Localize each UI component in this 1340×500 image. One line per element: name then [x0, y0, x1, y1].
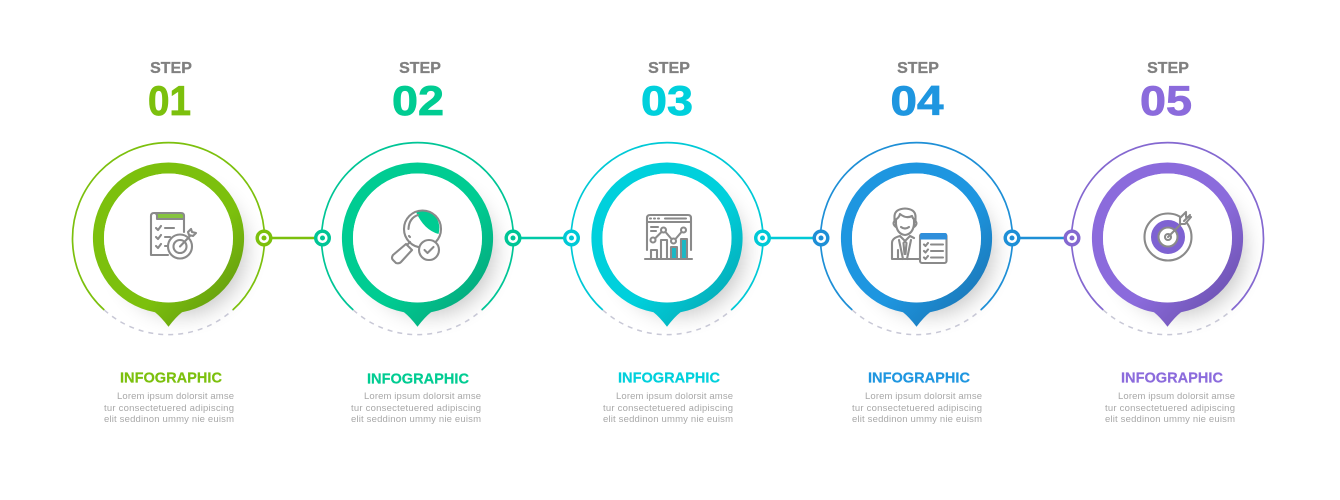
- step 3: [571, 60, 763, 425]
- step 4 heading: INFOGRAPHIC: [868, 370, 970, 386]
- step 1 outer ring: [72, 143, 264, 310]
- step 4 dashed arc: [852, 310, 981, 335]
- step 3 dashed arc: [603, 310, 731, 335]
- step 2 heading: INFOGRAPHIC: [367, 370, 469, 388]
- step 1 pin ring: [93, 162, 244, 327]
- icon: target with arrow: [1144, 212, 1192, 260]
- step 2 shadow: [366, 187, 494, 315]
- step 1 description: tur consectetuered adipiscing: [104, 403, 234, 414]
- step 4 description: tur consectetuered adipiscing: [852, 403, 982, 414]
- step 3 number: 03: [641, 77, 693, 124]
- step 4 label: STEP: [897, 60, 939, 77]
- step 2 inner disc: [353, 174, 482, 302]
- step 2: [322, 60, 514, 425]
- step 1 description: Lorem ipsum dolorsit amse: [117, 391, 234, 402]
- step 3 description: elit seddinon ummy nie euism: [603, 414, 733, 425]
- step 5 description: Lorem ipsum dolorsit amse: [1118, 391, 1235, 402]
- step 4 shadow: [866, 187, 994, 315]
- connector 1 to 2: [257, 231, 329, 245]
- step 5 description: elit seddinon ummy nie euism: [1105, 414, 1235, 425]
- step 2 description: tur consectetuered adipiscing: [351, 403, 481, 414]
- step 3 label: STEP: [648, 60, 690, 77]
- step 1 inner disc: [104, 174, 233, 302]
- step 3 description: tur consectetuered adipiscing: [603, 403, 733, 414]
- step 3 description: [603, 391, 733, 425]
- step 5 heading: INFOGRAPHIC: [1121, 370, 1223, 386]
- connector 2 to 3: [506, 231, 578, 245]
- step 2 dashed arc: [353, 310, 482, 335]
- step 4 inner disc: [852, 174, 981, 302]
- connector 4 to 5: [1005, 231, 1079, 245]
- step 5 number: 05: [1140, 77, 1192, 124]
- connector 3 to 4: [756, 231, 828, 245]
- icon: person with checklist: [892, 208, 947, 263]
- step 4 outer ring: [820, 143, 1012, 310]
- step 3 heading: INFOGRAPHIC: [618, 370, 720, 386]
- step 2 outer ring: [322, 143, 514, 310]
- step 5 shadow: [1116, 187, 1244, 315]
- step 5 dashed arc: [1103, 310, 1232, 335]
- step 1 label: STEP: [150, 60, 192, 77]
- step 1: [72, 60, 264, 425]
- step 4 description: [852, 391, 982, 425]
- step 5 label: STEP: [1147, 60, 1189, 77]
- step 5 outer ring: [1072, 143, 1264, 310]
- step 3 pin ring: [591, 162, 743, 327]
- step 3 inner disc: [602, 174, 732, 302]
- icon: magnifier with check: [392, 210, 441, 263]
- step 5 description: [1105, 391, 1235, 425]
- icon: analytics window: [645, 215, 692, 259]
- step 2 description: elit seddinon ummy nie euism: [351, 414, 481, 425]
- step 1 description: elit seddinon ummy nie euism: [104, 414, 234, 425]
- step 2 label: STEP: [399, 60, 441, 77]
- step 5: [1072, 60, 1264, 425]
- step 4: [820, 60, 1012, 425]
- step 1 heading: INFOGRAPHIC: [120, 370, 222, 386]
- step 2 description: [351, 391, 481, 425]
- step 5 inner disc: [1103, 174, 1232, 302]
- step 2 pin ring: [342, 162, 493, 327]
- step 1 description: [104, 391, 234, 425]
- step 5 description: tur consectetuered adipiscing: [1105, 403, 1235, 414]
- step 3 description: Lorem ipsum dolorsit amse: [616, 391, 733, 402]
- step 1 shadow: [118, 187, 246, 315]
- step 3 shadow: [616, 187, 744, 315]
- step 4 number: 04: [890, 77, 944, 124]
- icon: checklist with target: [151, 213, 196, 258]
- step 4 pin ring: [841, 162, 992, 327]
- step 2 description: Lorem ipsum dolorsit amse: [364, 391, 481, 402]
- step 1 number: 01: [148, 77, 191, 124]
- step 3 outer ring: [571, 143, 763, 310]
- step 4 description: Lorem ipsum dolorsit amse: [865, 391, 982, 402]
- step 1 dashed arc: [104, 310, 233, 335]
- step 5 pin ring: [1092, 162, 1243, 327]
- step 4 description: elit seddinon ummy nie euism: [852, 414, 982, 425]
- step 2 number: 02: [392, 77, 444, 124]
